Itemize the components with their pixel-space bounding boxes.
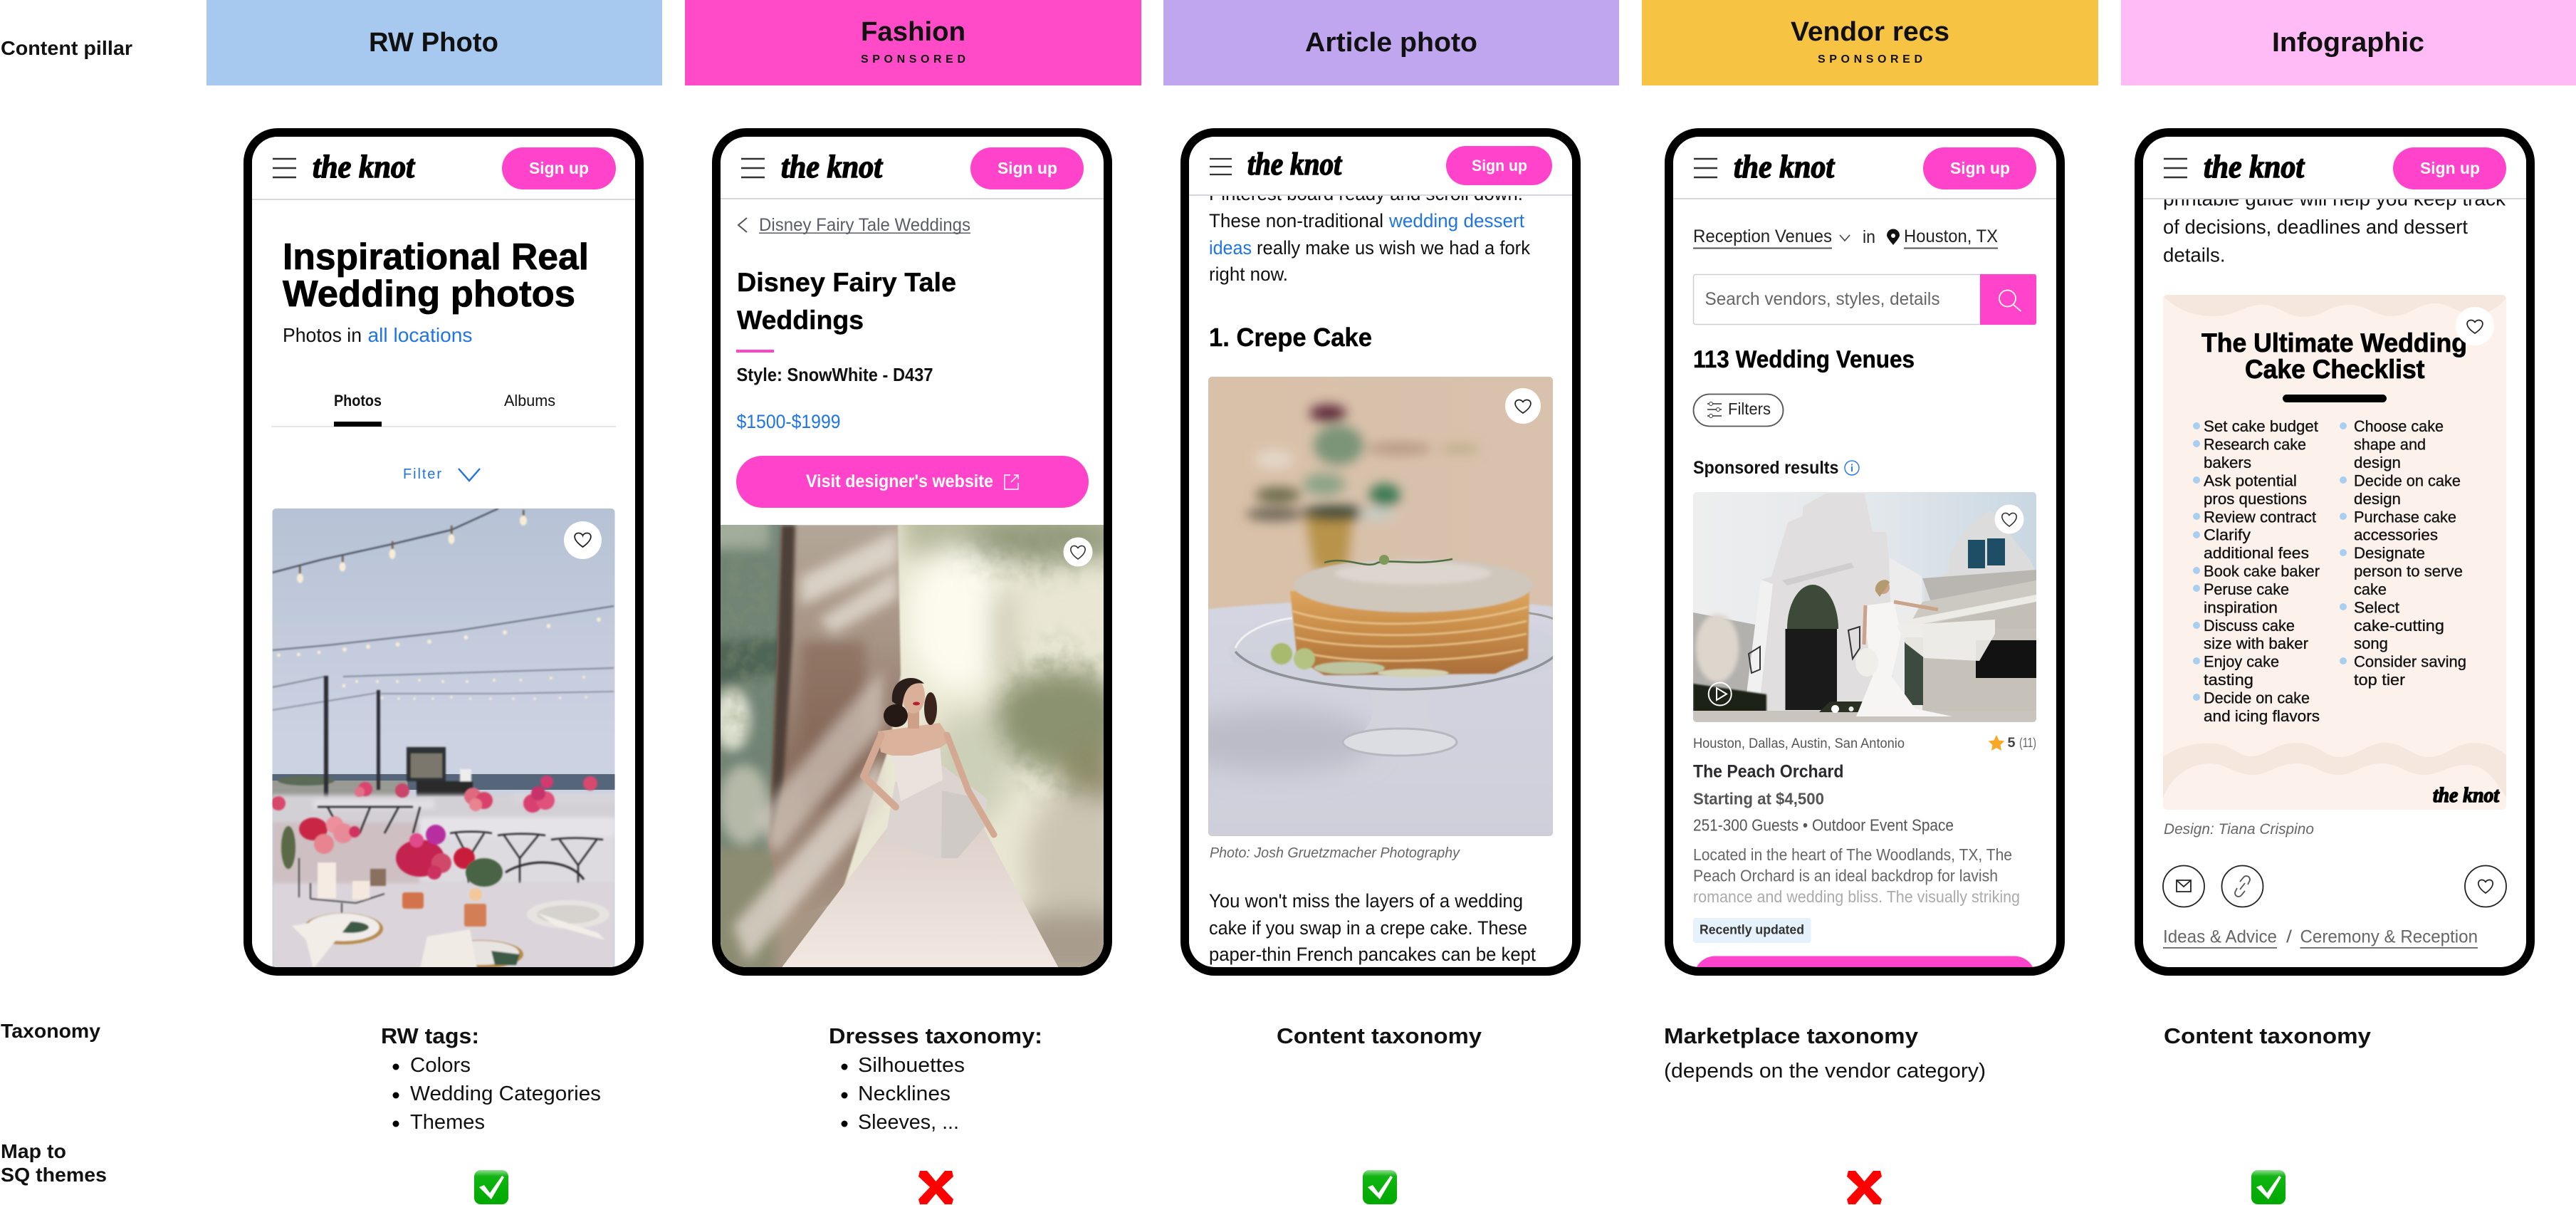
results heading: 113 Wedding Venues xyxy=(1693,346,1915,373)
category and location selector: in xyxy=(1863,227,1875,247)
taxonomy: RW tags: Wedding Categories xyxy=(410,1083,601,1105)
phone: Infographic xyxy=(2135,128,2535,976)
navigation bar: the knot xyxy=(1247,147,1343,182)
sponsored results label: Sponsored results xyxy=(1693,458,1838,478)
navigation bar: Sign up xyxy=(529,159,589,177)
checklist title: Cake Checklist xyxy=(2245,355,2425,384)
photo: venue with bride xyxy=(1693,492,2036,722)
category and location selector: Reception Venues xyxy=(1693,226,1832,246)
row label: content pillar: Content pillar xyxy=(1,37,132,59)
header: Fashion, sponsored: SPONSORED xyxy=(861,53,965,66)
header: Article photo xyxy=(1163,0,1619,85)
icon: green check, RW Photo xyxy=(474,1170,508,1204)
navigation bar: Sign up xyxy=(998,159,1057,177)
navigation bar xyxy=(252,137,635,200)
navigation bar: the knot xyxy=(2204,148,2305,184)
breadcrumb links: / xyxy=(2286,927,2292,947)
search box: Search vendors, styles, details xyxy=(1705,289,1939,309)
design credit: Design: Tiana Crispino xyxy=(2164,821,2314,838)
location line: all locations xyxy=(367,324,473,346)
article intro text: wedding dessert xyxy=(1388,210,1524,231)
icon: red cross, Fashion xyxy=(918,1171,953,1204)
checklist column two: Decide on cake xyxy=(2354,471,2461,490)
checklist column one: additional fees xyxy=(2204,544,2309,562)
article intro text: printable guide will help you keep track xyxy=(2163,188,2506,209)
listing details: romance and wedding bliss. The visually striking xyxy=(1693,887,2020,906)
article intro text xyxy=(1209,196,1530,285)
button: cropped call to action xyxy=(1694,956,2036,998)
filter control: Filter xyxy=(403,466,441,482)
icon: green check, Infographic xyxy=(2251,1170,2286,1204)
article intro text: really make us wish we had a fork xyxy=(1257,237,1530,259)
row label: map to SQ themes: SQ themes xyxy=(1,1164,107,1186)
listing details: Starting at $4,500 xyxy=(1693,789,1824,808)
listing details: Peach Orchard is an ideal backdrop for lavish xyxy=(1693,866,1998,885)
location line: Photos in xyxy=(283,324,362,346)
navigation bar xyxy=(1673,147,2056,199)
navigation bar: the knot xyxy=(1734,148,1835,184)
checklist column one: Decide on cake xyxy=(2204,689,2310,706)
badge: recently updated xyxy=(1693,918,1811,943)
header: Fashion, sponsored xyxy=(685,0,1141,85)
phone: Fashion xyxy=(698,128,1131,997)
listing details: Houston, Dallas, Austin, San Antonio xyxy=(1693,736,1905,751)
checklist title: The Ultimate Wedding xyxy=(2201,328,2467,358)
breadcrumb links: Ceremony & Reception xyxy=(2300,927,2478,947)
checklist column one: Set cake budget xyxy=(2204,417,2319,435)
header: Infographic xyxy=(2121,0,2576,85)
article intro text: Pinterest board ready and scroll down. xyxy=(1209,183,1523,204)
tabs: Albums xyxy=(504,392,555,410)
header: Fashion, sponsored: Fashion xyxy=(861,17,965,47)
article body text: paper-thin French pancakes can be kept xyxy=(1209,944,1536,965)
checklist column two: Consider saving xyxy=(2354,652,2466,671)
checklist column two: design xyxy=(2354,490,2401,508)
header: Vendor recs, sponsored xyxy=(1642,0,2098,85)
article intro text: of decisions, deadlines and dessert xyxy=(2163,216,2468,238)
checklist column two: cake-cutting xyxy=(2354,617,2444,635)
icon: favourite heart xyxy=(1995,504,2023,534)
checklist column one: Discuss cake xyxy=(2204,617,2295,635)
category and location selector: Houston, TX xyxy=(1904,226,1998,246)
article body text: You won't miss the layers of a wedding xyxy=(1209,890,1523,912)
play icon xyxy=(1709,682,1732,705)
checklist column two: cake xyxy=(2354,580,2387,598)
checklist column two: accessories xyxy=(2354,526,2438,544)
badge: recently updated: Recently updated xyxy=(1700,923,1804,937)
checklist column two: top tier xyxy=(2354,671,2406,689)
navigation bar xyxy=(721,147,1104,199)
navigation bar xyxy=(1189,137,1572,196)
article intro text: details. xyxy=(2163,244,2226,266)
listing details: Located in the heart of The Woodlands, TX, The xyxy=(1693,845,2012,864)
checklist column one: Book cake baker xyxy=(2204,563,2320,580)
location line xyxy=(284,328,471,342)
taxonomy: dresses: Dresses taxonomy: xyxy=(829,1023,1042,1048)
listing details: 251-300 Guests • Outdoor Event Space xyxy=(1693,816,1954,835)
icon: favourite heart xyxy=(2456,307,2494,345)
taxonomy: dresses: Sleeves, ... xyxy=(858,1111,959,1134)
taxonomy: RW tags: Themes xyxy=(410,1111,485,1134)
checklist column one: size with baker xyxy=(2204,635,2308,652)
icon: favourite heart xyxy=(564,521,602,559)
photo: bride in forest xyxy=(721,525,1104,967)
icon: green check, Article photo xyxy=(1363,1170,1397,1204)
checklist column one: bakers xyxy=(2204,454,2251,471)
breadcrumb links xyxy=(2163,927,2478,949)
checklist column one: Ask potential xyxy=(2204,471,2297,490)
checklist column two: person to serve xyxy=(2354,563,2463,580)
header: RW Photo xyxy=(206,0,662,85)
page title: Wedding photos xyxy=(283,273,575,315)
taxonomy: RW tags: Colors xyxy=(410,1054,471,1077)
checklist title xyxy=(2201,328,2467,402)
taxonomy: article content: Content taxonomy xyxy=(1277,1023,1482,1048)
checklist column one: pros questions xyxy=(2204,490,2307,508)
article intro text: These non-traditional xyxy=(1209,210,1383,231)
checklist column two: Designate xyxy=(2354,544,2425,562)
photo credit: Photo: Josh Gruetzmacher Photography xyxy=(1210,845,1460,861)
icon: favourite heart xyxy=(1064,537,1092,567)
taxonomy: marketplace: (depends on the vendor category) xyxy=(1664,1060,1986,1083)
photo: crepe cake xyxy=(1208,377,1553,836)
button: visit website: Visit designer's website xyxy=(806,471,993,491)
taxonomy: marketplace xyxy=(1664,1023,1986,1083)
page title: Inspirational Real xyxy=(283,236,589,278)
article body text: cake if you swap in a crepe cake. These xyxy=(1209,917,1527,939)
icon: favourite heart xyxy=(1505,388,1541,424)
filters pill xyxy=(1693,395,1783,426)
category and location selector xyxy=(1693,226,1998,249)
row label: map to SQ themes: Map to xyxy=(1,1140,66,1162)
page title xyxy=(283,236,589,315)
header: Vendor recs, sponsored: SPONSORED xyxy=(1818,53,1922,66)
checklist column one: and icing flavors xyxy=(2204,707,2320,725)
style and price: $1500-$1999 xyxy=(736,411,840,432)
product title xyxy=(736,268,956,353)
section heading: 1. Crepe Cake xyxy=(1209,323,1372,352)
navigation bar: the knot xyxy=(313,148,415,184)
breadcrumb links: Ideas & Advice xyxy=(2163,927,2277,947)
taxonomy: RW tags: RW tags: xyxy=(381,1023,479,1048)
header: RW Photo: RW Photo xyxy=(369,28,498,58)
button: visit website xyxy=(736,456,1089,508)
navigation bar: the knot xyxy=(781,148,883,184)
article body text xyxy=(1209,890,1536,965)
checklist column two: Choose cake xyxy=(2354,417,2444,435)
checklist column two xyxy=(2340,417,2466,689)
listing details xyxy=(1693,735,2036,906)
checklist column one: inspiration xyxy=(2204,598,2278,617)
checklist column two: shape and xyxy=(2354,436,2426,453)
search box xyxy=(1693,274,2036,325)
checklist column two: design xyxy=(2354,454,2401,471)
filters pill: Filters xyxy=(1728,400,1771,418)
checklist column two: Select xyxy=(2354,598,2400,617)
phone: RW Photo xyxy=(244,128,644,976)
style and price xyxy=(736,364,933,432)
checklist column two: song xyxy=(2354,635,2388,652)
header: Infographic: Infographic xyxy=(2272,28,2424,58)
breadcrumb: Disney Fairy Tale Weddings xyxy=(759,215,970,235)
phone: Article photo xyxy=(1175,128,1581,976)
taxonomy: dresses xyxy=(829,1023,1042,1134)
header: Vendor recs, sponsored: Vendor recs xyxy=(1791,17,1949,47)
taxonomy: dresses: Silhouettes xyxy=(858,1054,965,1077)
infographic logo: the knot xyxy=(2433,783,2501,807)
navigation bar xyxy=(2143,137,2526,199)
style and price: Style: SnowWhite - D437 xyxy=(736,364,933,385)
article intro text: ideas xyxy=(1209,237,1252,259)
icon: copy link xyxy=(2221,866,2263,907)
taxonomy: marketplace: Marketplace taxonomy xyxy=(1664,1023,1919,1048)
checklist column one xyxy=(2193,417,2320,725)
checklist column one: Research cake xyxy=(2204,436,2306,453)
taxonomy: infographic content: Content taxonomy xyxy=(2164,1023,2372,1048)
navigation bar: Sign up xyxy=(1472,157,1527,174)
checklist column one: tasting xyxy=(2204,671,2253,689)
checklist column one: Enjoy cake xyxy=(2204,652,2279,671)
photo: rooftop reception tables xyxy=(271,508,616,976)
checklist column one: Peruse cake xyxy=(2204,580,2289,598)
icon: save heart xyxy=(2465,866,2506,907)
listing details: The Peach Orchard xyxy=(1693,762,1844,782)
taxonomy: RW tags xyxy=(381,1023,601,1134)
navigation bar: Sign up xyxy=(2420,159,2480,177)
checklist column two: Purchase cake xyxy=(2354,508,2456,526)
product title: Disney Fairy Tale xyxy=(737,268,956,297)
filter control xyxy=(403,466,480,482)
taxonomy: dresses: Necklines xyxy=(858,1083,951,1105)
listing details: 5 xyxy=(2008,736,2016,751)
row label: map to SQ themes xyxy=(1,1140,107,1186)
product title: Weddings xyxy=(737,306,864,335)
phone: Vendor recs xyxy=(1665,128,2065,998)
tabs: Photos xyxy=(334,392,382,410)
icon: red cross, Vendor recs xyxy=(1847,1171,1882,1204)
article intro text: right now. xyxy=(1209,264,1288,285)
icon: share by email xyxy=(2163,866,2204,907)
checklist column one: Clarify xyxy=(2204,526,2251,544)
article intro text xyxy=(2163,188,2506,266)
checklist column one: Review contract xyxy=(2204,508,2317,526)
infographic: cake checklist xyxy=(2163,295,2506,810)
listing details: (11) xyxy=(2019,736,2036,750)
header: Article photo: Article photo xyxy=(1305,28,1477,58)
row label: taxonomy: Taxonomy xyxy=(1,1020,100,1042)
tabs xyxy=(271,392,616,427)
navigation bar: Sign up xyxy=(1950,159,2010,177)
